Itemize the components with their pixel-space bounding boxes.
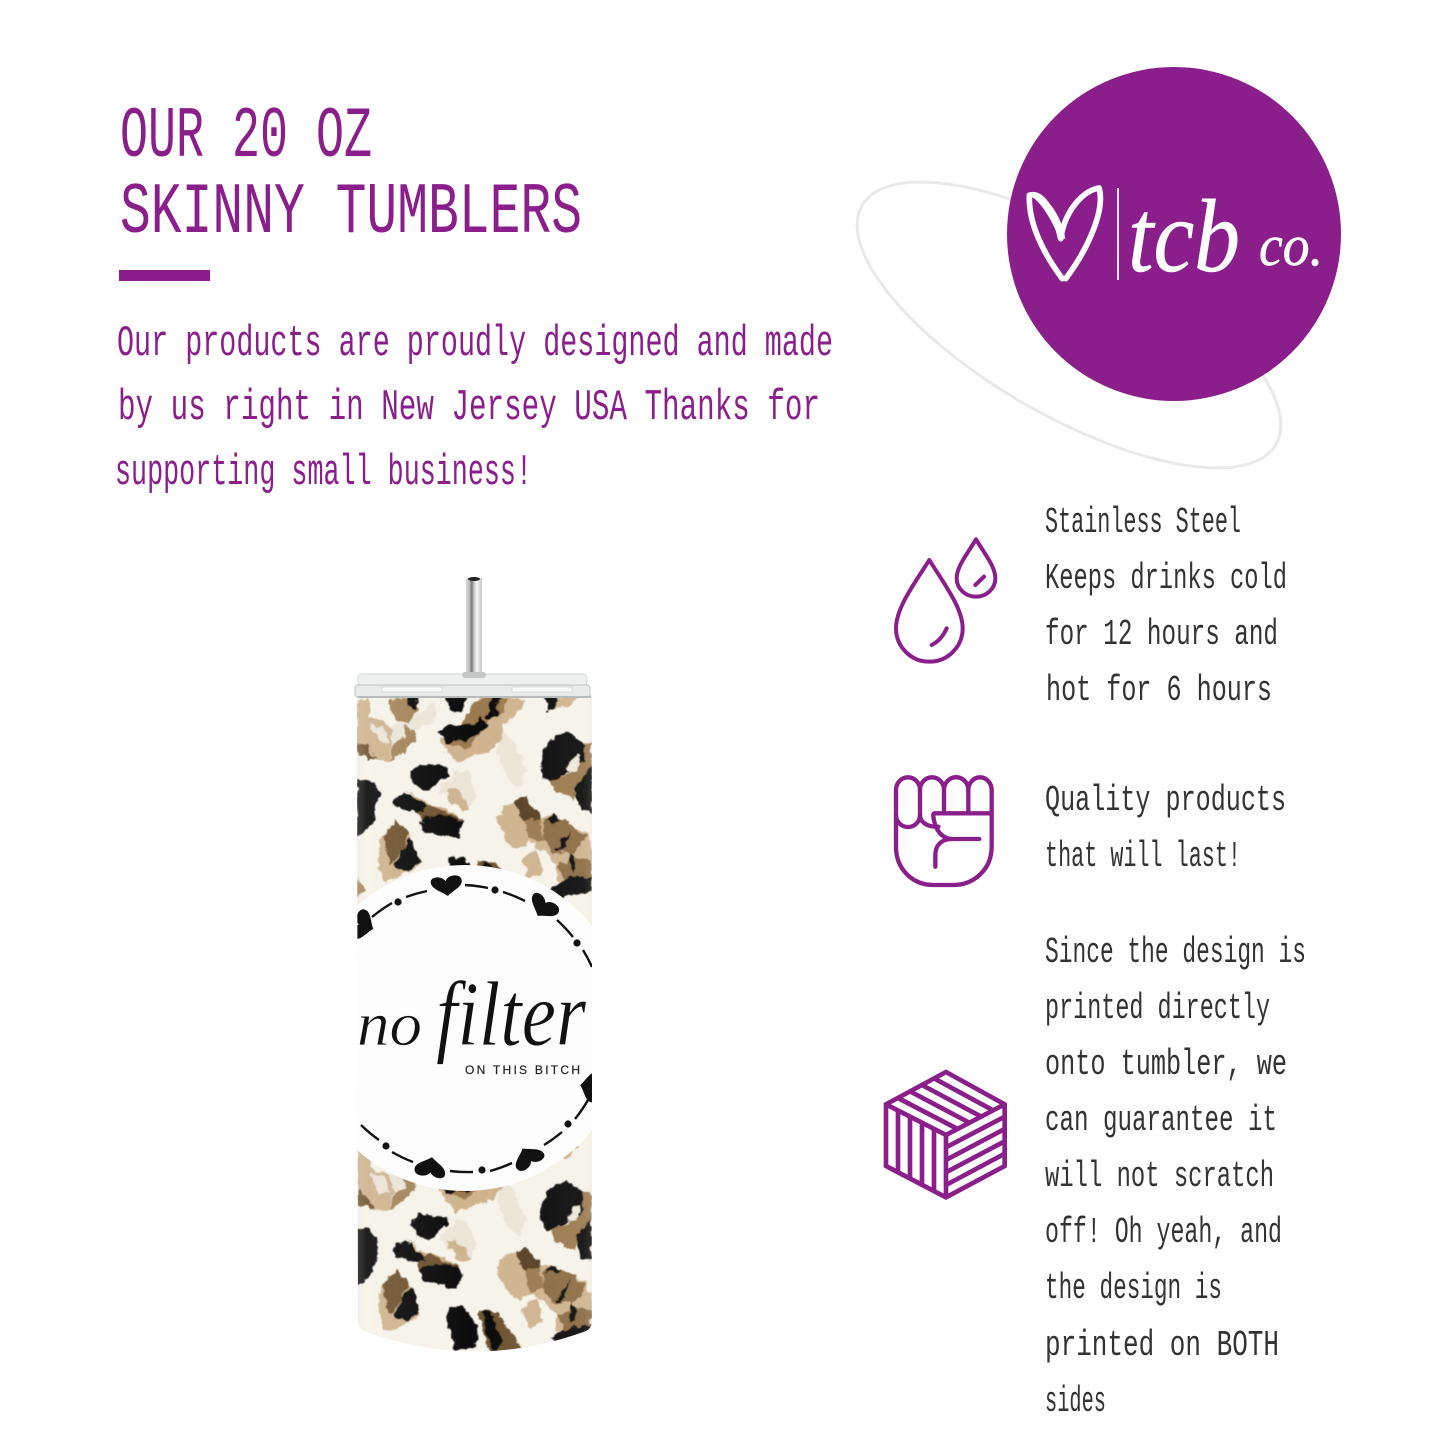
icon: striped box bbox=[886, 1072, 1005, 1197]
feature text: printing: sides bbox=[1045, 1381, 1106, 1422]
intro text: supporting small business! bbox=[115, 448, 532, 498]
feature text: printing: will not scratch bbox=[1045, 1156, 1274, 1197]
title: SKINNY TUMBLERS bbox=[120, 172, 582, 254]
feature text: printing: onto tumbler, we bbox=[1045, 1044, 1287, 1085]
feature text: stainless steel: Keeps drinks cold bbox=[1045, 558, 1287, 599]
intro text: by us right in New Jersey USA Thanks for bbox=[118, 383, 820, 433]
feature text: printing: printed on BOTH bbox=[1045, 1325, 1279, 1366]
feature text: printing: the design is bbox=[1045, 1268, 1222, 1309]
feature text: quality: Quality products bbox=[1045, 780, 1286, 821]
ring dots bbox=[382, 886, 581, 1174]
label artwork bbox=[357, 865, 592, 1191]
dashed ring bbox=[361, 885, 592, 1172]
feature text: printing: printed directly bbox=[1045, 988, 1270, 1029]
tumbler lid bbox=[355, 672, 591, 698]
icon: logo heart bbox=[1029, 188, 1100, 279]
logo wordmark: co. bbox=[1259, 213, 1323, 278]
label text: on this bitch: ON THIS BITCH bbox=[465, 1063, 580, 1077]
feature text: printing: Since the design is bbox=[1045, 932, 1306, 973]
feature text: stainless steel bbox=[1045, 502, 1287, 711]
feature text: quality: that will last! bbox=[1045, 836, 1241, 877]
feature text: printing bbox=[1045, 932, 1306, 1422]
feature text: printing: can guarantee it bbox=[1045, 1100, 1277, 1141]
label text: no filter: no bbox=[357, 991, 422, 1059]
icon: raised fist bbox=[896, 777, 992, 885]
title bbox=[120, 96, 582, 254]
label text: no filter: filter bbox=[436, 963, 587, 1065]
logo wordmark bbox=[1128, 179, 1323, 294]
ring hearts bbox=[349, 875, 603, 1180]
logo wordmark: tcb bbox=[1128, 179, 1240, 294]
tumbler product image bbox=[354, 577, 592, 1352]
intro text: Our products are proudly designed and made bbox=[117, 319, 833, 369]
feature text: stainless steel: hot for 6 hours bbox=[1046, 670, 1272, 711]
icon: water drops bbox=[896, 539, 995, 662]
tumbler body with leopard print bbox=[355, 690, 595, 1380]
label text: no filter bbox=[360, 980, 586, 1064]
logo badge bbox=[1007, 67, 1341, 401]
decorative orbit ellipse bbox=[817, 127, 1321, 523]
feature text: quality bbox=[1045, 780, 1286, 877]
feature text: stainless steel: Stainless Steel bbox=[1045, 502, 1241, 543]
title: OUR 20 OZ bbox=[120, 96, 372, 178]
straw bbox=[466, 577, 482, 673]
intro text bbox=[115, 319, 833, 498]
feature text: printing: off! Oh yeah, and bbox=[1045, 1212, 1282, 1253]
logo divider bbox=[1117, 188, 1119, 280]
feature text: stainless steel: for 12 hours and bbox=[1045, 614, 1278, 655]
heading accent bar bbox=[119, 270, 210, 281]
white circular label bbox=[358, 865, 592, 1191]
